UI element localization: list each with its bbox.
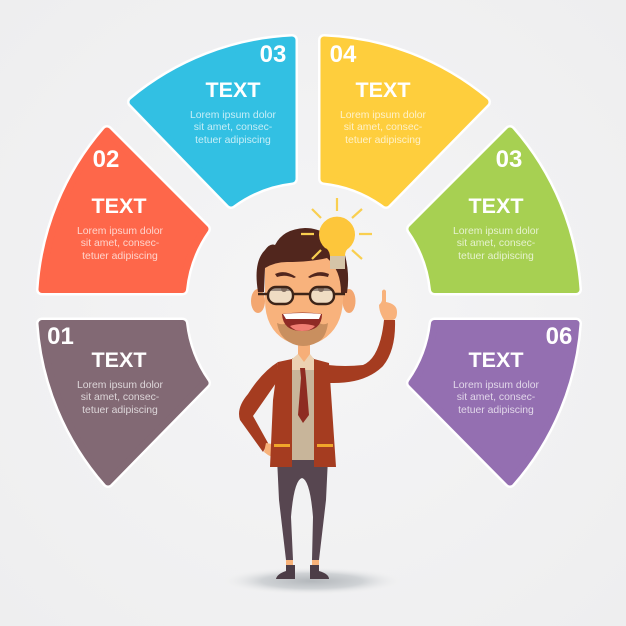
panel 04: sit amet, consec- xyxy=(344,122,422,133)
panel 05: TEXT xyxy=(469,194,523,218)
panel 06: Lorem ipsum dolor xyxy=(453,380,540,391)
hair xyxy=(257,228,348,293)
arm raised xyxy=(318,320,395,383)
panel 03 xyxy=(133,40,292,203)
panel 04 xyxy=(324,40,485,203)
beard xyxy=(277,322,328,346)
panel 01 xyxy=(42,323,205,482)
panel 03: 03 xyxy=(260,41,286,68)
panel 05: Lorem ipsum dolor xyxy=(453,226,540,237)
panel 01: TEXT xyxy=(92,348,146,372)
panel 04: TEXT xyxy=(356,78,410,102)
collar xyxy=(292,354,314,370)
panel 06: 06 xyxy=(546,323,572,350)
ankles xyxy=(286,560,319,566)
panel 04: 04 xyxy=(330,41,357,68)
panel 05: sit amet, consec- xyxy=(457,238,535,249)
panel 06: TEXT xyxy=(469,348,523,372)
arm left xyxy=(239,362,278,452)
hand xyxy=(379,290,397,320)
jacket xyxy=(270,359,336,467)
panel 05: tetuer adipiscing xyxy=(458,251,534,262)
panel 01: sit amet, consec- xyxy=(81,392,159,403)
panel 06 xyxy=(412,323,576,482)
panel 01: Lorem ipsum dolor xyxy=(77,380,164,391)
panel 04: Lorem ipsum dolor xyxy=(340,110,427,121)
hand on hip xyxy=(264,443,272,457)
legs xyxy=(277,458,328,560)
panel 02: TEXT xyxy=(92,194,146,218)
ground shadow xyxy=(220,567,404,595)
eyebrows xyxy=(275,272,329,278)
panel 03: TEXT xyxy=(206,78,260,102)
glasses xyxy=(258,286,345,304)
panel 05: 03 xyxy=(496,146,522,173)
mouth xyxy=(282,312,322,331)
face xyxy=(265,258,343,345)
panel 01: 01 xyxy=(47,323,74,350)
tie xyxy=(298,368,309,423)
panel 03: tetuer adipiscing xyxy=(195,135,271,146)
character xyxy=(239,198,397,579)
panel 02: Lorem ipsum dolor xyxy=(77,226,164,237)
pockets xyxy=(274,444,333,447)
panel 04: tetuer adipiscing xyxy=(345,135,421,146)
shirt xyxy=(292,358,314,460)
panel 05 xyxy=(412,131,576,290)
panel 02: sit amet, consec- xyxy=(81,238,159,249)
panel 06: tetuer adipiscing xyxy=(458,405,534,416)
ears xyxy=(251,289,265,313)
panel 03: sit amet, consec- xyxy=(194,122,272,133)
light bulb xyxy=(319,217,355,269)
neck xyxy=(298,340,310,362)
panel 02: tetuer adipiscing xyxy=(82,251,158,262)
panel 02: 02 xyxy=(93,146,119,173)
panel 06: sit amet, consec- xyxy=(457,392,535,403)
shoes xyxy=(276,565,329,579)
panel 01: tetuer adipiscing xyxy=(82,405,158,416)
panel 03: Lorem ipsum dolor xyxy=(190,110,277,121)
panel 02 xyxy=(42,131,205,290)
bulb rays xyxy=(301,198,372,259)
